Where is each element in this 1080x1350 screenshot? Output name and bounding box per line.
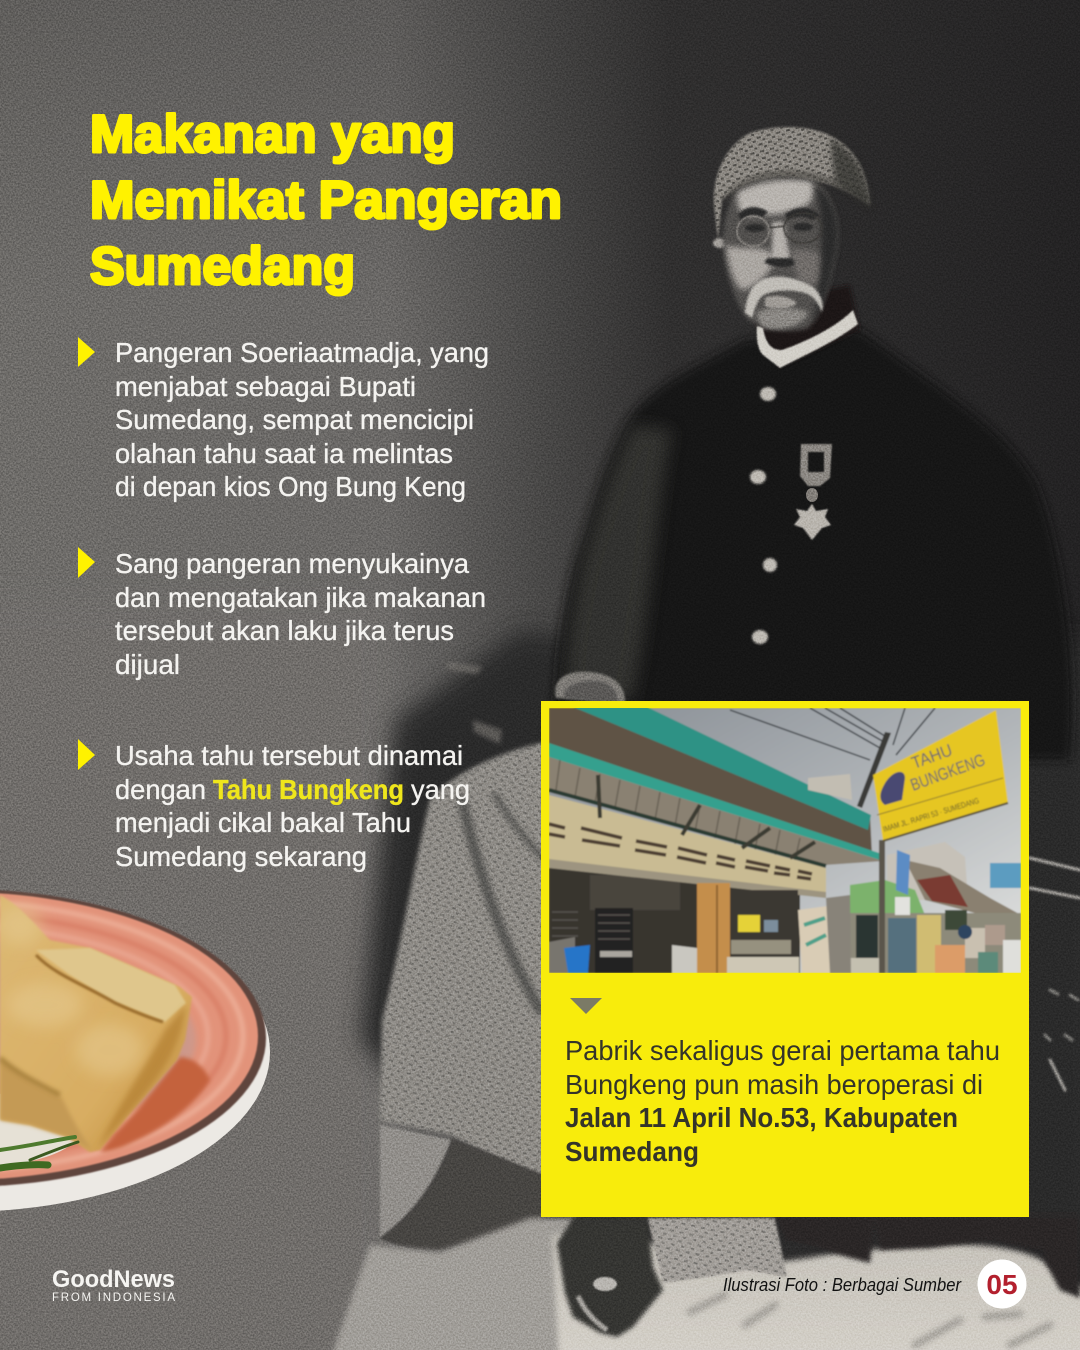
bullet text 3: yang (411, 774, 470, 805)
rooftop structure (808, 774, 852, 800)
bullet text 1: Pangeran Soeriaatmadja, yang (115, 337, 489, 368)
shop wall (850, 958, 884, 973)
page number badge (978, 1260, 1026, 1308)
dark folds above fur (775, 1215, 1080, 1298)
bullet text 1 (115, 337, 489, 502)
bullet text 3: Usaha tahu tersebut dinamai (115, 740, 463, 771)
snow-like fur floor (552, 1232, 1080, 1350)
distant roof (908, 860, 1018, 914)
plate of fried tofu (0, 889, 270, 1212)
callout text: Sumedang (565, 1136, 699, 1167)
pillar (697, 883, 730, 973)
plate rings (0, 902, 243, 1170)
glasses (737, 213, 822, 246)
left shutter (595, 908, 633, 973)
medal ribbon (800, 444, 832, 486)
bullet text 3: menjadi cikal bakal Tahu (115, 807, 411, 838)
plate rim (0, 892, 270, 1212)
callout text: Pabrik sekaligus gerai pertama tahu (565, 1035, 1000, 1066)
boot (557, 1218, 663, 1337)
arrow: pointer down (570, 998, 602, 1014)
shop goods (888, 910, 1021, 973)
concrete beam (549, 859, 826, 898)
cheek light (726, 245, 772, 290)
sock texture (648, 1218, 786, 1282)
sign divider (877, 778, 1003, 815)
knit texture (380, 744, 541, 1170)
plate centre (0, 1092, 80, 1168)
bullet text 1: di depan kios Ong Bung Keng (115, 471, 466, 502)
bullet text 2: dan mengatakan jika makanan (115, 582, 486, 613)
page number badge: 05 (986, 1269, 1018, 1300)
tofu lumps (0, 905, 144, 1076)
title (90, 105, 562, 296)
window (754, 889, 799, 896)
utility wires (730, 708, 935, 760)
beam line (549, 790, 826, 866)
bullet text 1: menjabat sebagai Bupati (115, 371, 416, 402)
title: Sumedang (90, 237, 355, 296)
poster (798, 906, 831, 973)
knit cloth on lap (380, 740, 560, 1190)
medal link (806, 488, 818, 502)
utility pole (857, 732, 891, 808)
ear (713, 238, 727, 248)
callout text: Jalan 11 April No.53, Kabupaten (565, 1102, 958, 1133)
tofu body (0, 895, 192, 1152)
plate dark glaze patch (100, 1057, 210, 1152)
bullet text 2: tersebut akan laku jika terus (115, 615, 454, 646)
shop window (856, 915, 878, 958)
distant sign (990, 863, 1021, 888)
chin beard (756, 308, 808, 329)
bullet text 3: Sumedang sekarang (115, 841, 367, 872)
medal star (794, 504, 831, 540)
title: Memikat Pangeran (90, 171, 562, 230)
title: Makanan yang (90, 105, 455, 164)
dark area around lap (360, 630, 1080, 1240)
beige wall (549, 795, 826, 895)
buttons (750, 387, 777, 644)
teal upper roof (573, 707, 871, 830)
interior back wall (590, 875, 680, 910)
forehead light (737, 180, 813, 216)
callout text: Bungkeng pun masih beroperasi di (565, 1069, 983, 1100)
window goods (731, 915, 791, 954)
left wall base (549, 937, 575, 973)
sign small text: IMAM JL. RAPRI 53 · SUMEDANG (882, 796, 980, 834)
brows and eye shadows (738, 207, 820, 268)
knit sock (647, 1218, 787, 1283)
wall vents (549, 824, 812, 879)
green wall (850, 880, 925, 915)
tofu crust shadow (98, 1005, 186, 1148)
bullet point 2 (78, 547, 486, 680)
left sleeve highlights (566, 425, 672, 700)
yellow shop sign (873, 710, 1008, 841)
bullet text 2: dijual (115, 649, 180, 680)
light floor left of boot (330, 1218, 575, 1350)
blue parking sign (896, 850, 910, 895)
plate centre shadow tone (0, 940, 196, 1140)
neck shadow (745, 285, 860, 368)
cuff (555, 672, 625, 702)
blue basket (564, 945, 590, 973)
cap texture (714, 127, 870, 238)
sign text: TAHU (909, 741, 955, 773)
bullet text 2 (115, 548, 486, 680)
chives (0, 1137, 78, 1168)
figure body and jacket (552, 330, 1073, 760)
logo: GoodNews from Indonesia: FROM INDONESIA (52, 1292, 175, 1304)
chair carving (1030, 858, 1080, 1090)
bullet text 1: olahan tahu saat ia melintas (115, 438, 453, 469)
plate glaze (0, 892, 258, 1180)
fur shadow strokes (690, 1295, 1050, 1345)
tofu crack (36, 955, 163, 1022)
cuff inner (564, 681, 618, 704)
bullet point 3 (78, 739, 470, 872)
icon: bullet triangle (78, 337, 95, 367)
sign base line (883, 803, 1008, 841)
building brown back (549, 708, 872, 855)
nose ridge (770, 222, 792, 266)
plate dark edge (0, 889, 266, 1187)
bullet text 1: Sumedang, sempat mencicipi (115, 404, 474, 435)
lower teal fascia (549, 743, 885, 861)
white sign (895, 897, 910, 915)
shop photo (549, 707, 1021, 973)
callout text (565, 1035, 1000, 1167)
sign logo (880, 772, 905, 805)
cap band shadow (722, 170, 870, 205)
icon: bullet triangle (78, 547, 95, 578)
bags beside pillar (672, 945, 697, 973)
bullet text 3 (115, 740, 470, 872)
cap base (714, 127, 870, 240)
panel background (541, 701, 1029, 1217)
red awning (917, 875, 968, 907)
moustache (745, 277, 823, 318)
photo credit: Ilustrasi Foto : Berbagai Sumber (723, 1275, 962, 1295)
tofu top flap (36, 948, 186, 1022)
lighter cloth under wedge (380, 1125, 452, 1238)
boot detail (578, 1277, 617, 1330)
roof brackets (598, 775, 815, 858)
collar (757, 310, 858, 368)
mouth and lip (765, 296, 797, 309)
icon: bullet triangle (78, 739, 95, 770)
interior dark (549, 866, 800, 973)
concrete column (826, 895, 851, 973)
corrugated roof underside (549, 757, 883, 865)
right side shadow (812, 185, 838, 326)
bullet point 1 (78, 337, 489, 502)
right cheek mid tone (790, 250, 830, 285)
cap right shadow (830, 138, 872, 210)
tofu side shadow (0, 1060, 92, 1150)
wall below window (727, 957, 799, 973)
cloth folds (462, 795, 545, 1010)
bullet text 3: dengan (115, 774, 206, 805)
portrait: seated prince (330, 120, 1080, 1350)
yellow callout panel (541, 701, 1029, 1217)
light patches on the dark lap backdrop (445, 662, 502, 744)
face base (723, 176, 838, 331)
white building (887, 842, 968, 900)
logo: GoodNews from Indonesia: GoodNews (52, 1266, 175, 1293)
bullet text 3: Tahu Bungkeng (213, 774, 404, 805)
street shop front (850, 913, 1021, 973)
yellow shop sign: BUNGKENG (908, 750, 988, 795)
dark fold wedge (380, 1138, 545, 1250)
bullet text 2: Sang pangeran menyukainya (115, 548, 469, 579)
tofu crease (0, 1058, 60, 1095)
